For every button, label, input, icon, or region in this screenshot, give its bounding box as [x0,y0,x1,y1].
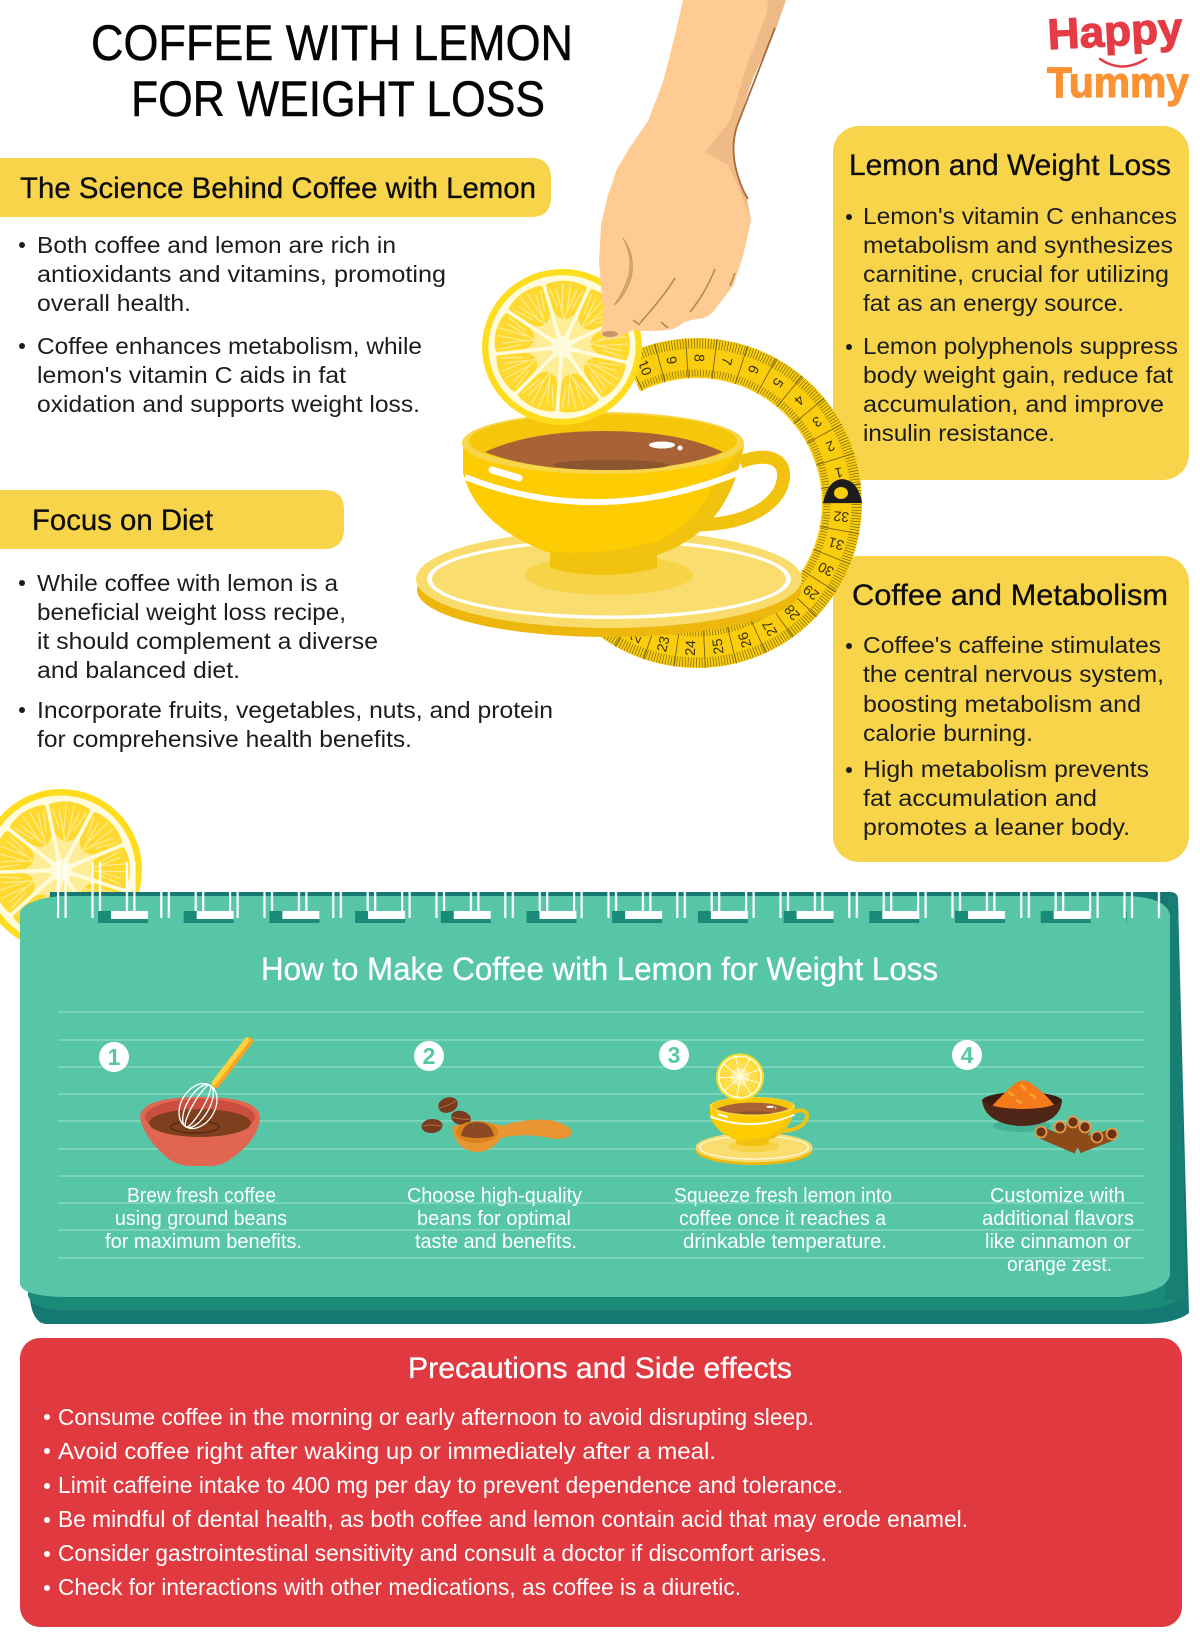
heading: precautions: Precautions and Side effects [408,1352,792,1385]
text block: metabolism bullets: fat accumulation and [863,785,1097,811]
icon: small cup with lemon [696,1054,813,1165]
step number 2 [414,1041,444,1071]
text block: precautions list [44,1404,968,1600]
title: FOR WEIGHT LOSS [131,71,545,127]
text: step 3: Squeeze fresh lemon into [674,1184,892,1207]
icon: measuring tape [602,343,862,662]
text: step 4: orange zest. [1007,1253,1112,1276]
text: step 4 [982,1184,1134,1276]
text: step 4: additional flavors [982,1207,1134,1230]
text: step 2 [407,1184,583,1253]
text block: science bullets: oxidation and supports weight loss. [37,391,420,417]
icon: orange zest bowl and cinnamon [982,1080,1118,1148]
icon: spoon and coffee beans [421,1095,572,1152]
title: COFFEE WITH LEMON [91,15,573,71]
text block: diet bullets: While coffee with lemon is a [37,570,339,596]
text block: metabolism bullets: Coffee's caffeine stimulates [863,632,1161,658]
text block: science bullets [19,232,446,417]
title [91,15,573,127]
icon: measuring tape: 9 [663,355,680,366]
icon: measuring tape: 30 [815,559,836,580]
text block: diet bullets: for comprehensive health benefits. [37,726,412,752]
text: step 2: Choose high-quality [407,1184,583,1207]
text block: metabolism bullets: promotes a leaner body. [863,814,1130,840]
step 3 [659,1040,892,1253]
step number 1 [99,1042,129,1072]
panel: lemon and weight loss [833,126,1189,480]
text: step 1: for maximum benefits. [105,1230,302,1253]
text: step 1: Brew fresh coffee [127,1184,276,1207]
text block: lemon bullets [846,203,1178,446]
text block: science bullets: Both coffee and lemon are rich in [37,232,396,258]
text: step 1 [105,1184,302,1253]
text block: metabolism bullets: calorie burning. [863,720,1033,746]
heading pill: science [0,158,551,217]
text: step 1: using ground beans [115,1207,287,1230]
text: step 2: beans for optimal [417,1207,571,1230]
icon: measuring tape: 23 [653,634,673,653]
text: step 2: taste and benefits. [415,1230,577,1253]
icon: measuring tape: 8 [691,354,708,362]
icon: measuring tape: 27 [759,618,780,639]
text block: metabolism bullets [846,632,1164,840]
icon: measuring tape: 4 [791,392,808,409]
step 1 [99,1040,302,1253]
logo: Happy Tummy: Tummy [1047,59,1189,107]
icon: measuring tape: 25 [709,637,727,655]
text block: metabolism bullets: High metabolism prevents [863,756,1149,782]
icon: lemon slice [477,264,647,430]
icon: lemon slice behind notebook [0,789,142,951]
icon: measuring tape: 31 [826,534,846,554]
text: step 4: Customize with [990,1184,1125,1207]
panel: focus on diet [0,490,553,752]
text block: lemon bullets: fat as an energy source. [863,290,1124,316]
text block: precautions list: Consume coffee in the morning or early afternoon to avoid disrupting sleep. [58,1404,814,1430]
text block: science bullets: antioxidants and vitamins, promoting [37,261,446,287]
icon: measuring tape: 2 [824,437,837,455]
text block: diet bullets: Incorporate fruits, vegetables, nuts, and protein [37,697,553,723]
text: step 3: drinkable temperature. [683,1230,887,1253]
text block: lemon bullets: accumulation, and improve [863,391,1164,417]
text block: metabolism bullets: boosting metabolism and [863,691,1141,717]
notebook ring holes [98,905,1127,925]
icon: measuring tape: 6 [745,363,763,376]
step number 2: 2 [423,1043,435,1069]
text block: metabolism bullets: the central nervous system, [863,661,1164,687]
icon: hand [599,0,786,338]
panel: coffee and metabolism [833,556,1189,862]
icon: measuring tape: 7 [718,356,736,367]
text block: precautions list: Consider gastrointestinal sensitivity and consult a doctor if discomfort arises. [58,1540,827,1566]
text block: diet bullets: and balanced diet. [37,657,240,683]
text: step 4: like cinnamon or [985,1230,1131,1253]
panel: how to make notebook [20,862,1189,1324]
icon: measuring tape: 10 [635,357,655,378]
text block: science bullets: lemon's vitamin C aids in fat [37,362,346,388]
logo: Happy Tummy [1046,4,1189,107]
logo: Happy Tummy: Happy [1046,4,1184,59]
heading pill: science: The Science Behind Coffee with Lemon [20,172,536,205]
icon: measuring tape: 22 [626,624,647,645]
step number 4 [952,1040,982,1070]
heading: coffee and metabolism: Coffee and Metabolism [852,579,1168,612]
text: step 3: coffee once it reaches a [679,1207,887,1230]
step number 1: 1 [108,1044,121,1070]
text block: diet bullets: it should complement a diverse [37,628,378,654]
text block: precautions list: Avoid coffee right after waking up or immediately after a meal. [58,1438,716,1464]
text block: lemon bullets: insulin resistance. [863,420,1055,446]
heading: how to make: How to Make Coffee with Lemon for Weight Loss [261,951,938,987]
text block: science bullets: overall health. [37,290,191,316]
text block: diet bullets [19,570,553,752]
text block: lemon bullets: Lemon's vitamin C enhances [863,203,1177,229]
icon: measuring tape: 28 [781,601,803,624]
text block: lemon bullets: body weight gain, reduce fat [863,362,1173,388]
icon: coffee cup on saucer [416,412,802,637]
icon: measuring tape: 26 [734,630,755,650]
text block: lemon bullets: metabolism and synthesizes [863,232,1173,258]
text block: science bullets: Coffee enhances metabolism, while [37,333,422,359]
icon: measuring tape: 29 [800,581,822,604]
step number 3 [659,1040,689,1070]
panel: precautions and side effects [20,1338,1182,1627]
text block: lemon bullets: carnitine, crucial for utilizing [863,261,1169,287]
text block: diet bullets: beneficial weight loss recipe, [37,599,346,625]
icon: measuring tape: 3 [809,413,825,431]
notebook rings [57,862,1165,918]
heading pill: diet [0,490,344,549]
heading pill: diet: Focus on Diet [32,504,214,537]
step number 4: 4 [961,1042,974,1068]
text block: precautions list: Check for interactions with other medications, as coffee is a diuretic. [58,1574,741,1600]
step 4 [952,1040,1134,1276]
text block: precautions list: Be mindful of dental health, as both coffee and lemon contain acid that may erode enamel. [58,1506,968,1532]
panel: the science behind coffee with lemon [0,158,551,417]
icon: measuring tape: 1 [833,464,844,482]
icon: measuring tape: 24 [682,639,699,656]
icon: measuring tape: 5 [769,375,787,391]
text block: precautions list: Limit caffeine intake to 400 mg per day to prevent dependence and tolerance. [58,1472,843,1498]
step number 3: 3 [668,1042,680,1068]
icon: measuring tape: 32 [833,508,850,526]
text: step 3 [674,1184,892,1253]
icon: bowl and whisk [140,1040,260,1166]
heading: lemon and weight loss: Lemon and Weight Loss [849,149,1171,182]
step 2 [407,1041,583,1253]
text block: lemon bullets: Lemon polyphenols suppress [863,333,1178,359]
